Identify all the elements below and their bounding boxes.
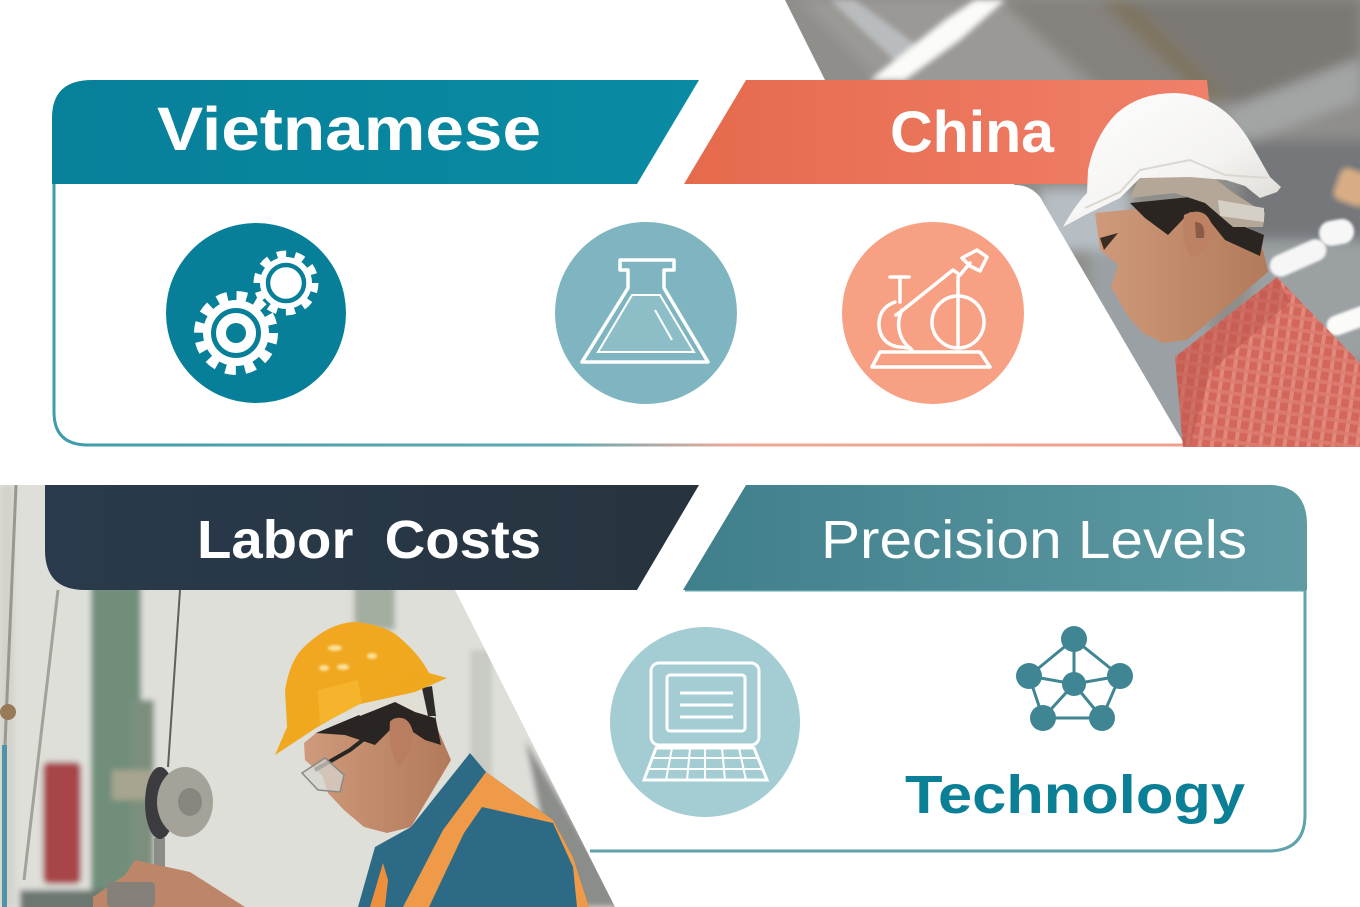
header: Labor Costs: Labor Costs <box>197 510 541 570</box>
shirt <box>1175 277 1360 447</box>
icon: flask <box>555 222 737 404</box>
label: Technology: Technology <box>905 765 1245 825</box>
header: Precision Levels <box>683 485 1307 590</box>
helmet lining <box>359 700 435 718</box>
panel: bottom card outline <box>590 590 1305 851</box>
hands <box>93 860 245 907</box>
helmet <box>1063 93 1281 227</box>
header: Vietnamese: Vietnamese <box>157 95 541 163</box>
ear <box>1184 212 1212 223</box>
photo: factory background <box>770 0 1360 460</box>
photo: worker in yellow helmet <box>0 475 630 907</box>
helmet <box>275 622 447 755</box>
photo: worker in white helmet <box>1063 93 1360 447</box>
glasses <box>315 715 395 770</box>
panel: top card outline <box>54 184 1186 445</box>
icon: exercise machine with arrow <box>842 222 1024 404</box>
header: Precision Levels: Precision Levels <box>821 510 1247 570</box>
header: Vietnamese <box>52 80 699 184</box>
jacket <box>358 753 589 907</box>
hair <box>316 700 441 745</box>
icon: gears <box>166 223 346 403</box>
icon: laptop <box>610 627 800 817</box>
vest <box>403 772 589 907</box>
icon: technology network <box>1016 626 1133 731</box>
helmet strap <box>1130 175 1265 227</box>
header: China: China <box>890 100 1055 165</box>
neck and face <box>1095 200 1268 343</box>
face <box>304 729 451 833</box>
header: Labor Costs <box>45 485 699 590</box>
header: China <box>684 80 1209 184</box>
ear <box>390 718 413 758</box>
hanging metal part <box>145 767 213 839</box>
hair <box>1130 195 1264 256</box>
